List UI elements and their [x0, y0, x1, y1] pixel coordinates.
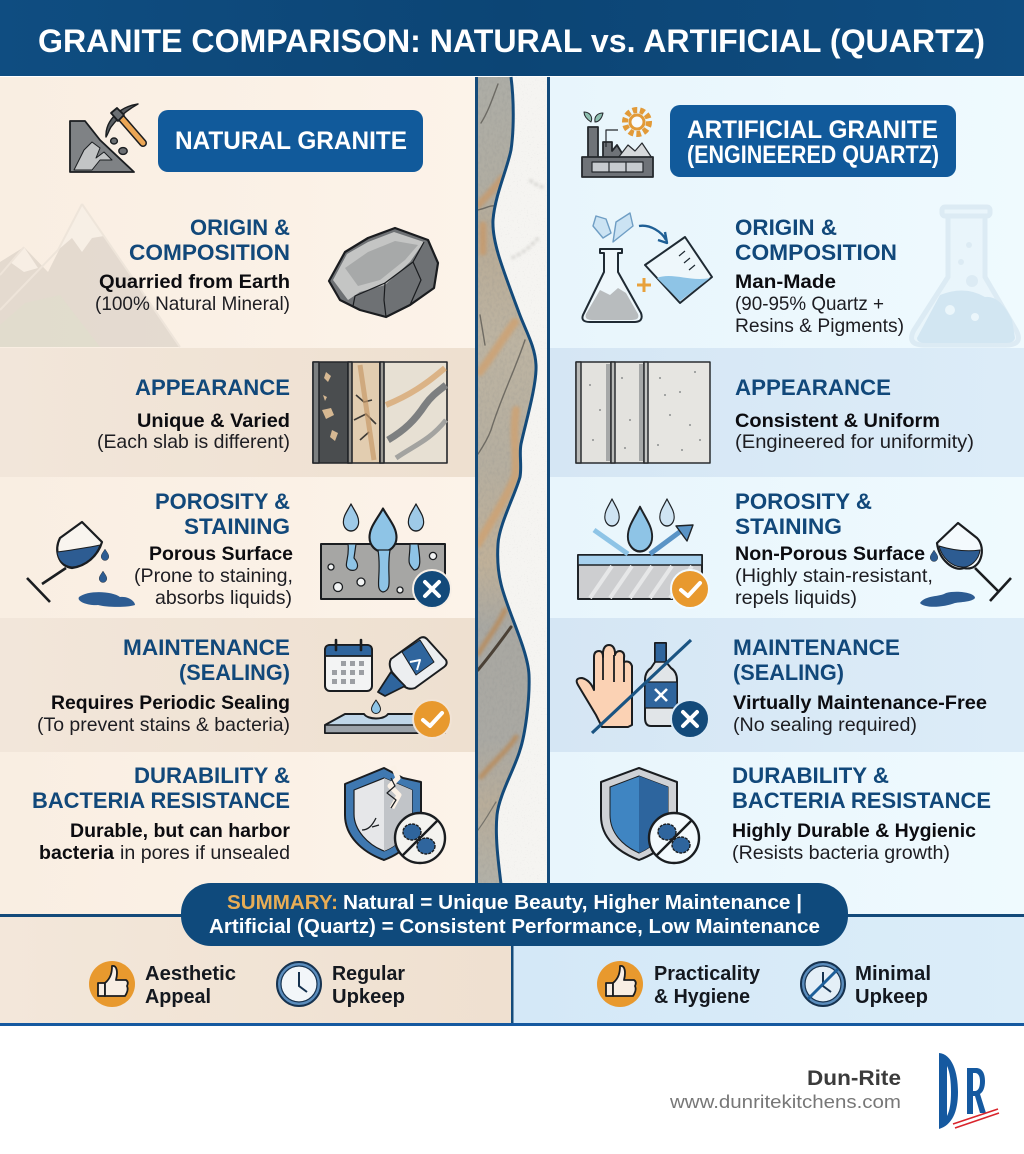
takeaway: aesthetic appeal: Appeal	[145, 985, 211, 1008]
description	[735, 410, 974, 453]
description: Durable, but can harbor	[70, 820, 290, 842]
wavy divider line	[493, 77, 536, 884]
heading: (SEALING)	[733, 660, 844, 685]
takeaway: minimal upkeep: Upkeep	[855, 985, 928, 1008]
description	[735, 271, 904, 337]
label pill: (ENGINEERED QUARTZ)	[687, 141, 939, 169]
takeaway: practicality and hygiene: & Hygiene	[654, 985, 750, 1008]
takeaway: practicality and hygiene	[597, 961, 761, 1008]
description	[97, 410, 290, 453]
natural granite header	[70, 104, 423, 172]
icon: spilled wine glass	[27, 522, 135, 607]
label pill	[670, 105, 956, 177]
description	[732, 820, 976, 864]
takeaway: regular upkeep: Regular	[332, 962, 405, 985]
row: durability natural	[32, 763, 445, 864]
icon: factory and gear	[582, 110, 653, 177]
description	[733, 692, 987, 736]
description: Quarried from Earth	[99, 271, 290, 293]
centre granite and marble band	[478, 77, 548, 885]
row: maintenance natural	[37, 635, 451, 738]
heading	[32, 763, 290, 813]
description	[39, 820, 290, 864]
icon: hand, bottle and slash	[577, 640, 709, 738]
heading: (SEALING)	[179, 660, 290, 685]
description: Resins & Pigments)	[735, 315, 904, 337]
description: (Prone to staining,	[134, 565, 293, 587]
footer brand: Dun-Rite	[807, 1067, 901, 1090]
description: (Resists bacteria growth)	[732, 842, 950, 864]
heading: APPEARANCE	[735, 375, 891, 400]
summary banner: Artificial (Quartz) = Consistent Performance, Low Maintenance	[209, 915, 820, 938]
badge: cross	[413, 570, 451, 608]
footer brand	[669, 1067, 901, 1112]
heading: STAINING	[184, 514, 290, 539]
takeaway: aesthetic appeal	[89, 961, 236, 1008]
icon: bacteria prohibited	[395, 813, 445, 863]
row: porosity natural	[27, 489, 451, 609]
icon: solid shield	[601, 768, 699, 863]
description	[134, 543, 293, 609]
icon: flask, crystals and beaker	[582, 213, 712, 322]
heading: COMPOSITION	[129, 240, 290, 265]
description: bacteria	[39, 842, 114, 864]
background illustration: mountains	[0, 204, 180, 347]
icon: natural slabs	[313, 362, 447, 463]
icon: sealant bottle and surface	[325, 637, 451, 738]
heading: POROSITY &	[735, 489, 872, 514]
icon: water repelling surface	[578, 499, 709, 608]
icon: rock	[329, 228, 438, 317]
takeaway: aesthetic appeal: Aesthetic	[145, 962, 236, 985]
label pill: ARTIFICIAL GRANITE	[687, 116, 938, 144]
heading: APPEARANCE	[135, 375, 290, 400]
icon: wine glass with repelled spill	[920, 523, 1011, 607]
description	[95, 271, 290, 315]
heading: POROSITY &	[155, 489, 290, 514]
label pill	[158, 110, 423, 172]
icon: quartz slabs	[576, 362, 710, 463]
description: (90-95% Quartz +	[735, 293, 884, 315]
panel: artificial granite	[549, 77, 1024, 915]
row: origin natural	[95, 215, 438, 317]
icon: bacteria prohibited	[649, 813, 699, 863]
heading: COMPOSITION	[735, 240, 897, 265]
heading	[735, 489, 872, 539]
takeaway: regular upkeep: Upkeep	[332, 985, 405, 1008]
background illustration: flask	[912, 207, 1018, 345]
badge: check	[671, 570, 709, 608]
icon: thumbs up	[597, 961, 643, 1007]
heading	[733, 635, 900, 685]
badge: cross	[671, 700, 709, 738]
description: Highly Durable & Hygienic	[732, 820, 976, 842]
description: Unique & Varied	[137, 410, 290, 432]
artificial granite header	[582, 105, 956, 177]
heading	[735, 215, 897, 265]
description: Virtually Maintenance-Free	[733, 692, 987, 714]
title banner	[0, 0, 1024, 76]
heading: ORIGIN &	[735, 215, 837, 240]
icon: thumbs up	[89, 961, 135, 1007]
description: absorbs liquids)	[155, 587, 292, 609]
badge: check	[413, 700, 451, 738]
icon: calendar	[325, 640, 372, 691]
description: (Highly stain-resistant,	[735, 565, 933, 587]
heading: STAINING	[735, 514, 842, 539]
description: Porous Surface	[149, 543, 293, 565]
heading: DURABILITY &	[134, 763, 290, 788]
description: Non-Porous Surface	[735, 543, 925, 565]
heading: MAINTENANCE	[733, 635, 900, 660]
takeaway: minimal upkeep	[801, 962, 931, 1008]
description	[735, 543, 933, 609]
icon: clock crossed	[801, 962, 845, 1006]
footer brand: www.dunritekitchens.com	[669, 1091, 901, 1112]
description: Requires Periodic Sealing	[51, 692, 290, 714]
takeaway: practicality and hygiene: Practicality	[654, 962, 761, 985]
takeaway: minimal upkeep: Minimal	[855, 962, 931, 985]
description: (Each slab is different)	[97, 431, 290, 453]
summary banner: Natural = Unique Beauty, Higher Maintenance |	[343, 891, 802, 914]
heading: DURABILITY &	[732, 763, 889, 788]
icon: porous stone with drops	[321, 504, 451, 608]
logo: DR	[939, 1053, 999, 1129]
description: repels liquids)	[735, 587, 857, 609]
title: GRANITE COMPARISON: NATURAL vs. ARTIFICIAL (QUARTZ)	[38, 23, 985, 59]
takeaway: regular upkeep	[277, 962, 405, 1008]
vertical borders	[475, 77, 550, 885]
bottom panels	[0, 914, 1024, 1026]
heading	[123, 635, 290, 685]
heading: BACTERIA RESISTANCE	[732, 788, 991, 813]
heading	[129, 215, 290, 265]
heading: MAINTENANCE	[123, 635, 290, 660]
icon: cracked shield	[345, 766, 445, 863]
row: porosity artificial	[578, 489, 1011, 609]
description: (To prevent stains & bacteria)	[37, 714, 290, 736]
heading	[155, 489, 290, 539]
description: (Engineered for uniformity)	[735, 431, 974, 453]
description: Consistent & Uniform	[735, 410, 940, 432]
description: in pores if unsealed	[120, 842, 290, 864]
row: appearance artificial	[576, 362, 974, 463]
summary banner: SUMMARY:	[227, 891, 338, 914]
heading: ORIGIN &	[190, 215, 290, 240]
heading: BACTERIA RESISTANCE	[32, 788, 290, 813]
description: (100% Natural Mineral)	[95, 293, 290, 315]
icon: mountain and pickaxe	[70, 104, 143, 172]
description: (No sealing required)	[733, 714, 917, 736]
row: durability artificial	[601, 763, 991, 864]
label pill: NATURAL GRANITE	[175, 127, 407, 155]
panel: natural granite	[0, 77, 476, 915]
row: origin artificial	[582, 213, 904, 337]
row: maintenance artificial	[577, 635, 987, 738]
summary banner	[181, 883, 848, 946]
row: appearance natural	[97, 362, 447, 463]
description	[37, 692, 290, 736]
icon: clock	[277, 962, 321, 1006]
description: Man-Made	[735, 271, 836, 293]
heading	[732, 763, 991, 813]
